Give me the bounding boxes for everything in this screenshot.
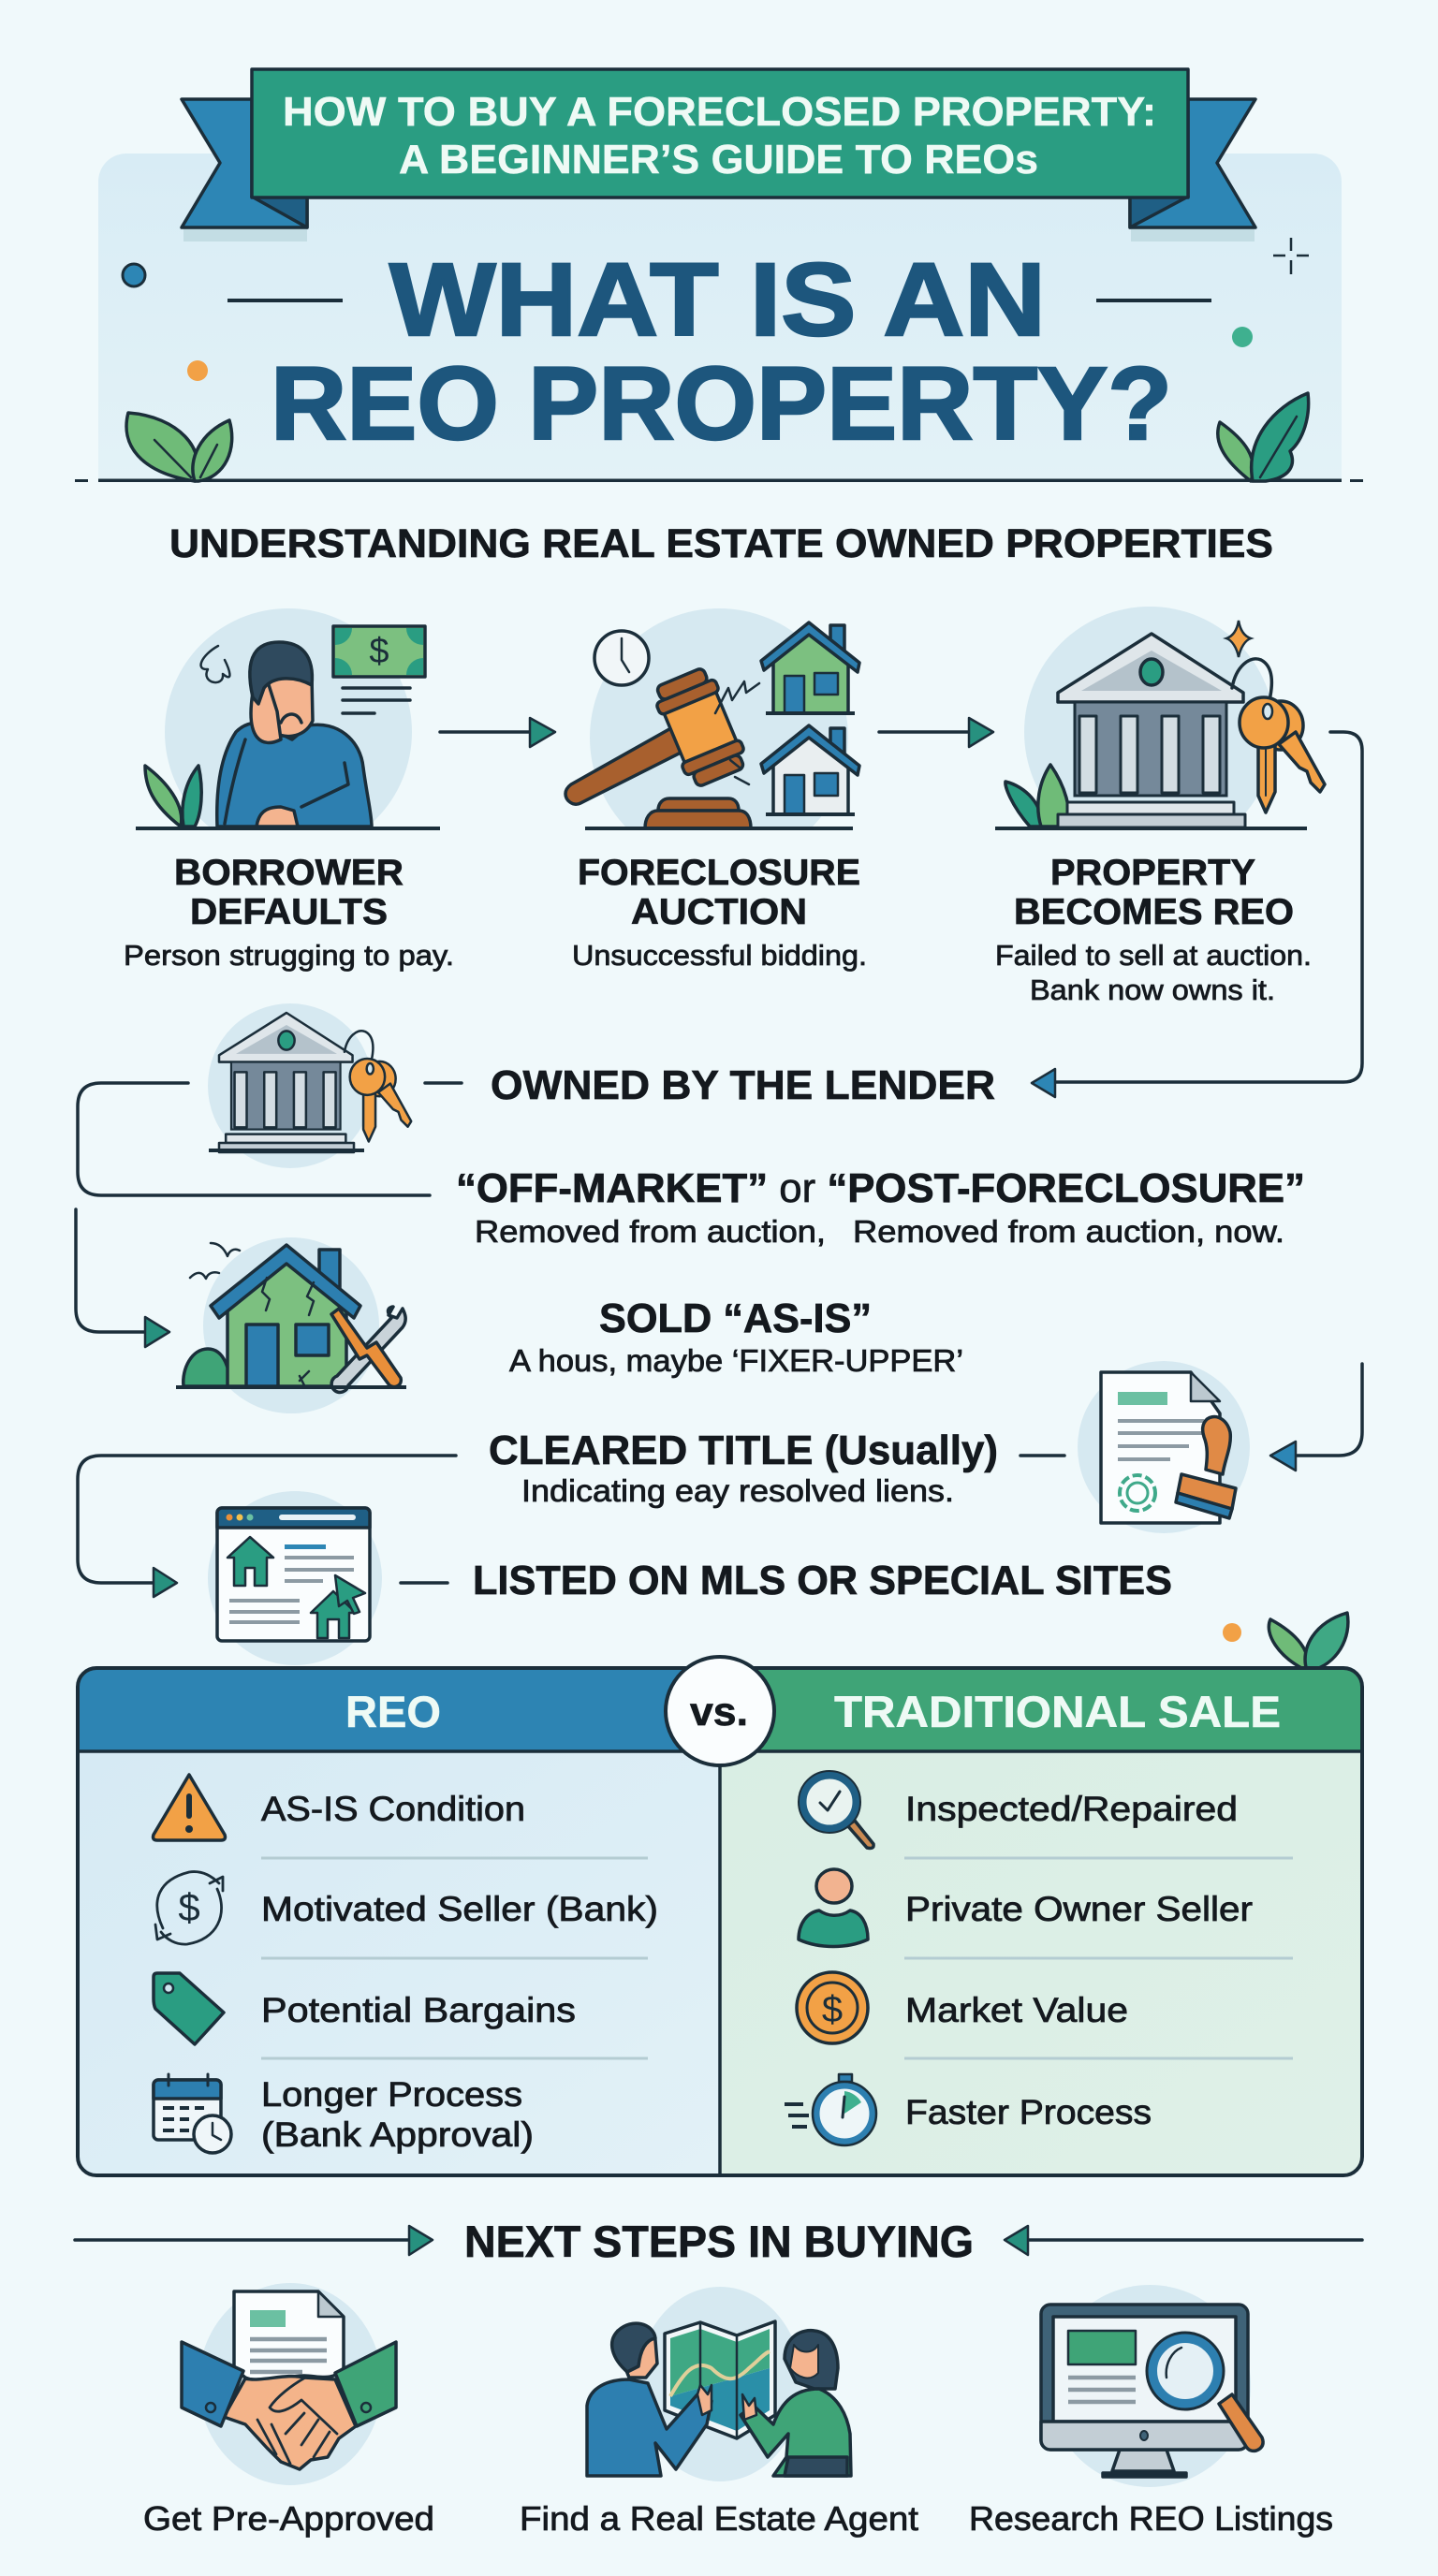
row: longer process: Longer Process	[261, 2075, 522, 2114]
arrow: connector to off-market	[78, 1083, 430, 1195]
label: Research REO Listings	[969, 2499, 1333, 2538]
text: CLEARED TITLE (Usually)	[489, 1427, 998, 1473]
panel: traditional sale column	[720, 1668, 1362, 2175]
panel: REO column	[78, 1668, 720, 2175]
row: as-is condition: AS-IS Condition	[261, 1790, 525, 1828]
icon: banknote: $	[369, 632, 389, 671]
icon: two people with map	[587, 2287, 851, 2481]
icon: handshake with document	[182, 2283, 396, 2485]
heading: OWNED BY THE LENDER	[491, 1062, 995, 1108]
icon: leaves right	[1218, 393, 1309, 481]
step 3: property becomes REO	[995, 607, 1325, 1006]
title decorations	[123, 238, 1309, 381]
icon: browser listing	[208, 1491, 382, 1665]
heading	[578, 853, 860, 932]
text: A hous, maybe ‘FIXER-UPPER’	[509, 1343, 963, 1378]
panel: REO column: REO	[345, 1687, 441, 1736]
main title: WHAT IS AN	[389, 242, 1046, 358]
row: market value: Market Value	[905, 1991, 1128, 2029]
banner title text: HOW TO BUY A FORECLOSED PROPERTY:	[283, 89, 1156, 135]
row: faster process	[785, 2074, 1152, 2145]
off-market text block: Removed from auction,	[475, 1214, 826, 1249]
icon: bank with keys	[995, 607, 1327, 830]
description: Failed to sell at auction.	[995, 939, 1312, 972]
heading: BECOMES REO	[1014, 892, 1294, 932]
vs badge: vs.	[690, 1690, 748, 1734]
row: private owner: Private Owner Seller	[905, 1890, 1253, 1928]
off-market text block	[456, 1165, 1305, 1249]
banner title text	[283, 89, 1156, 183]
row: private owner	[799, 1869, 1253, 1947]
step: research REO listings	[969, 2285, 1333, 2538]
main title	[271, 242, 1172, 461]
icon: damaged house with tools	[176, 1237, 406, 1413]
title ribbon banner	[182, 69, 1255, 242]
icon: monitor with magnifier	[1041, 2285, 1263, 2487]
description: Bank now owns it.	[1030, 973, 1275, 1006]
arrow: connector from step 3 to owned by lender	[1032, 732, 1362, 1097]
step 1: borrower defaults	[124, 608, 454, 972]
row: market value	[797, 1972, 1128, 2043]
heading: PROPERTY	[1050, 853, 1255, 893]
sold as-is row	[176, 1237, 963, 1413]
text	[489, 1427, 998, 1508]
off-market text block: “OFF-MARKET” or “POST-FORECLOSURE”	[456, 1165, 1305, 1211]
owned by the lender row	[208, 1003, 995, 1168]
icon: gavel and houses	[564, 608, 861, 830]
label: Find a Real Estate Agent	[520, 2499, 918, 2538]
row: motivated seller: $	[178, 1885, 200, 1929]
icon: bank with keys small	[208, 1003, 411, 1168]
row: potential bargains	[154, 1973, 576, 2044]
step: get pre-approved	[143, 2283, 434, 2538]
heading: BORROWER	[174, 853, 404, 893]
description: Person strugging to pay.	[124, 939, 454, 972]
arrow	[440, 718, 555, 747]
row: market value: $	[822, 1989, 843, 2030]
banner title text: A BEGINNER’S GUIDE TO REOs	[399, 137, 1038, 183]
arrow: connector to sold as-is	[76, 1209, 169, 1347]
icon: banknote	[333, 626, 425, 677]
subtitle: UNDERSTANDING REAL ESTATE OWNED PROPERTIES	[169, 521, 1273, 566]
row: inspected	[799, 1771, 1238, 1848]
step 2: foreclosure auction	[565, 608, 867, 972]
vs badge	[666, 1657, 774, 1765]
arrow	[879, 718, 993, 747]
step: find a real estate agent	[520, 2287, 918, 2538]
icon: green house	[761, 622, 859, 715]
heading: DEFAULTS	[190, 892, 388, 932]
next steps heading with arrows: NEXT STEPS IN BUYING	[464, 2217, 974, 2266]
icon: title document and stamp	[1078, 1361, 1250, 1533]
icon: white house	[761, 725, 859, 816]
row: inspected: Inspected/Repaired	[905, 1790, 1238, 1828]
heading	[174, 853, 404, 932]
text: SOLD “AS-IS”	[599, 1295, 872, 1341]
icon: bank building	[1058, 634, 1325, 827]
header panel	[75, 154, 1363, 482]
text	[509, 1295, 963, 1378]
label: Get Pre-Approved	[143, 2499, 434, 2538]
text: Indicating eay resolved liens.	[521, 1473, 954, 1508]
icon: stressed borrower	[136, 608, 440, 830]
row: as-is condition	[154, 1775, 525, 1840]
decoration: dot and leaves	[1223, 1613, 1348, 1671]
row: potential bargains: Potential Bargains	[261, 1991, 576, 2029]
next steps heading with arrows	[75, 2217, 1362, 2266]
arrow: connector to cleared title	[1270, 1364, 1362, 1471]
heading: LISTED ON MLS OR SPECIAL SITES	[473, 1558, 1172, 1603]
row: longer process: (Bank Approval)	[261, 2115, 534, 2154]
row: motivated seller: Motivated Seller (Bank)	[261, 1890, 658, 1928]
heading: AUCTION	[631, 892, 807, 932]
listed on MLS row	[208, 1491, 1172, 1665]
description: Unsuccessful bidding.	[572, 939, 867, 972]
row: faster process: Faster Process	[905, 2093, 1152, 2131]
row: motivated seller	[155, 1872, 658, 1944]
icon: leaves left	[126, 413, 232, 481]
description	[995, 939, 1312, 1006]
panel: traditional sale column: TRADITIONAL SALE	[834, 1687, 1281, 1736]
heading: FORECLOSURE	[578, 853, 860, 893]
off-market text block: Removed from auction, now.	[853, 1214, 1284, 1249]
comparison table	[78, 1657, 1362, 2175]
arrow: connector to listed on MLS	[78, 1456, 456, 1597]
cleared title row	[489, 1361, 1250, 1533]
main title: REO PROPERTY?	[271, 346, 1172, 461]
heading	[1014, 853, 1294, 932]
row: longer process	[154, 2074, 534, 2154]
